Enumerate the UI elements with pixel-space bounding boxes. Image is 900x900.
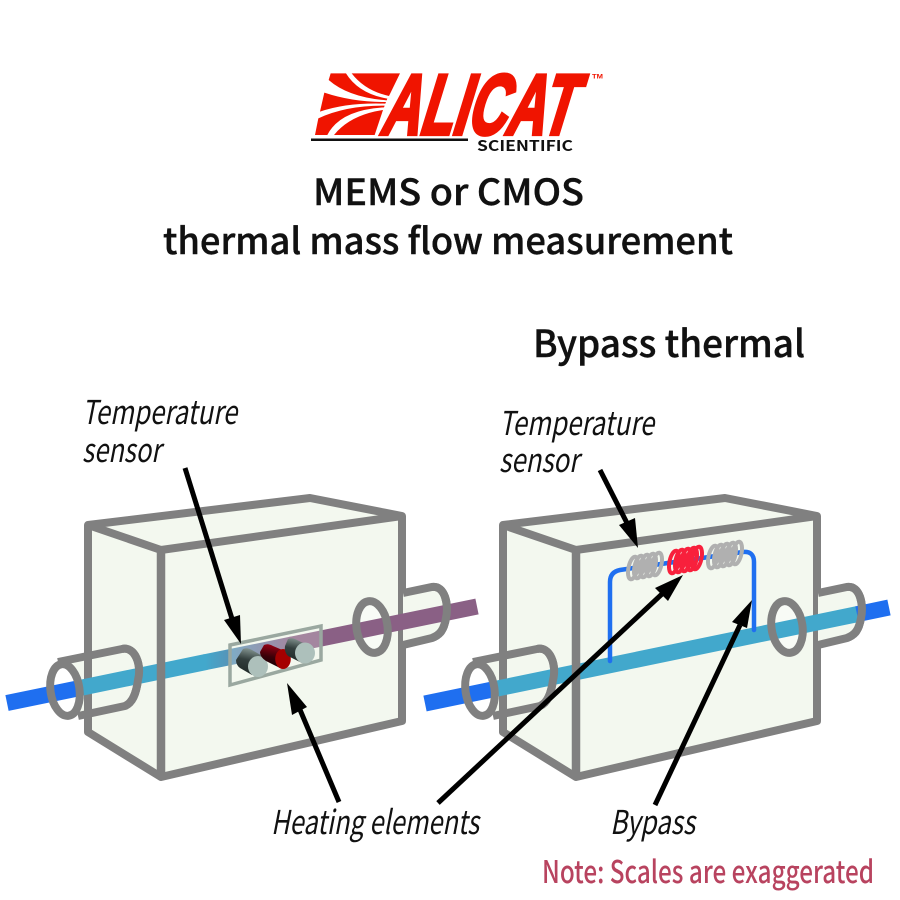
- arrow: left temperature sensor: [185, 468, 241, 644]
- housing body: [503, 498, 817, 777]
- sensor chip window: [230, 626, 321, 685]
- label: right temperature sensor: Temperature: [499, 397, 656, 445]
- heading: bypass thermal: Bypass thermal: [533, 314, 805, 368]
- bypass capillary tube: [610, 552, 754, 661]
- label: right temperature sensor: sensor: [499, 434, 583, 482]
- logo: Alicat Scientific: [311, 58, 603, 156]
- inlet tube: [473, 649, 554, 716]
- label: heating elements: Heating elements: [271, 796, 481, 844]
- logo swoosh: [315, 73, 400, 135]
- label: left temperature sensor: Temperature: [82, 386, 239, 434]
- logo subtitle: SCIENTIFIC: [477, 135, 574, 156]
- title: thermal mass flow measurement: [163, 213, 733, 265]
- label: left temperature sensor: [82, 386, 239, 472]
- temperature sensor cylinder: upstream: [236, 648, 268, 677]
- front vertical edge: [572, 550, 580, 777]
- outlet tube: [403, 587, 447, 645]
- label: right temperature sensor: [499, 397, 656, 482]
- title: [163, 164, 733, 265]
- temperature sensor cylinder: downstream: [285, 638, 315, 664]
- outlet tube: [818, 587, 862, 645]
- housing body: [88, 498, 402, 777]
- arrow: bypass: [655, 600, 752, 805]
- logo wordmark: ALICAT: [373, 58, 594, 153]
- heating element cylinder: [260, 644, 291, 669]
- logo underline: [311, 138, 468, 141]
- coil: downstream temperature sensor: [706, 541, 744, 569]
- label: bypass: Bypass: [610, 796, 697, 844]
- title: MEMS or CMOS: [313, 164, 584, 216]
- label: left temperature sensor: sensor: [82, 424, 165, 472]
- logo trademark: TM: [592, 74, 603, 80]
- front vertical edge: [157, 550, 165, 777]
- inlet tube: [58, 649, 139, 716]
- flow pipe: [7, 606, 477, 703]
- panel: bypass sensor housing: [425, 498, 889, 777]
- arrow: right heating elements: [438, 575, 683, 803]
- arrow: right temperature sensor: [600, 470, 638, 548]
- arrow: left heating elements: [287, 683, 339, 802]
- flow pipe: [425, 608, 889, 704]
- coil: heating element: [667, 546, 704, 574]
- panel: MEMS sensor housing: [7, 498, 477, 777]
- coil: upstream temperature sensor: [626, 552, 664, 580]
